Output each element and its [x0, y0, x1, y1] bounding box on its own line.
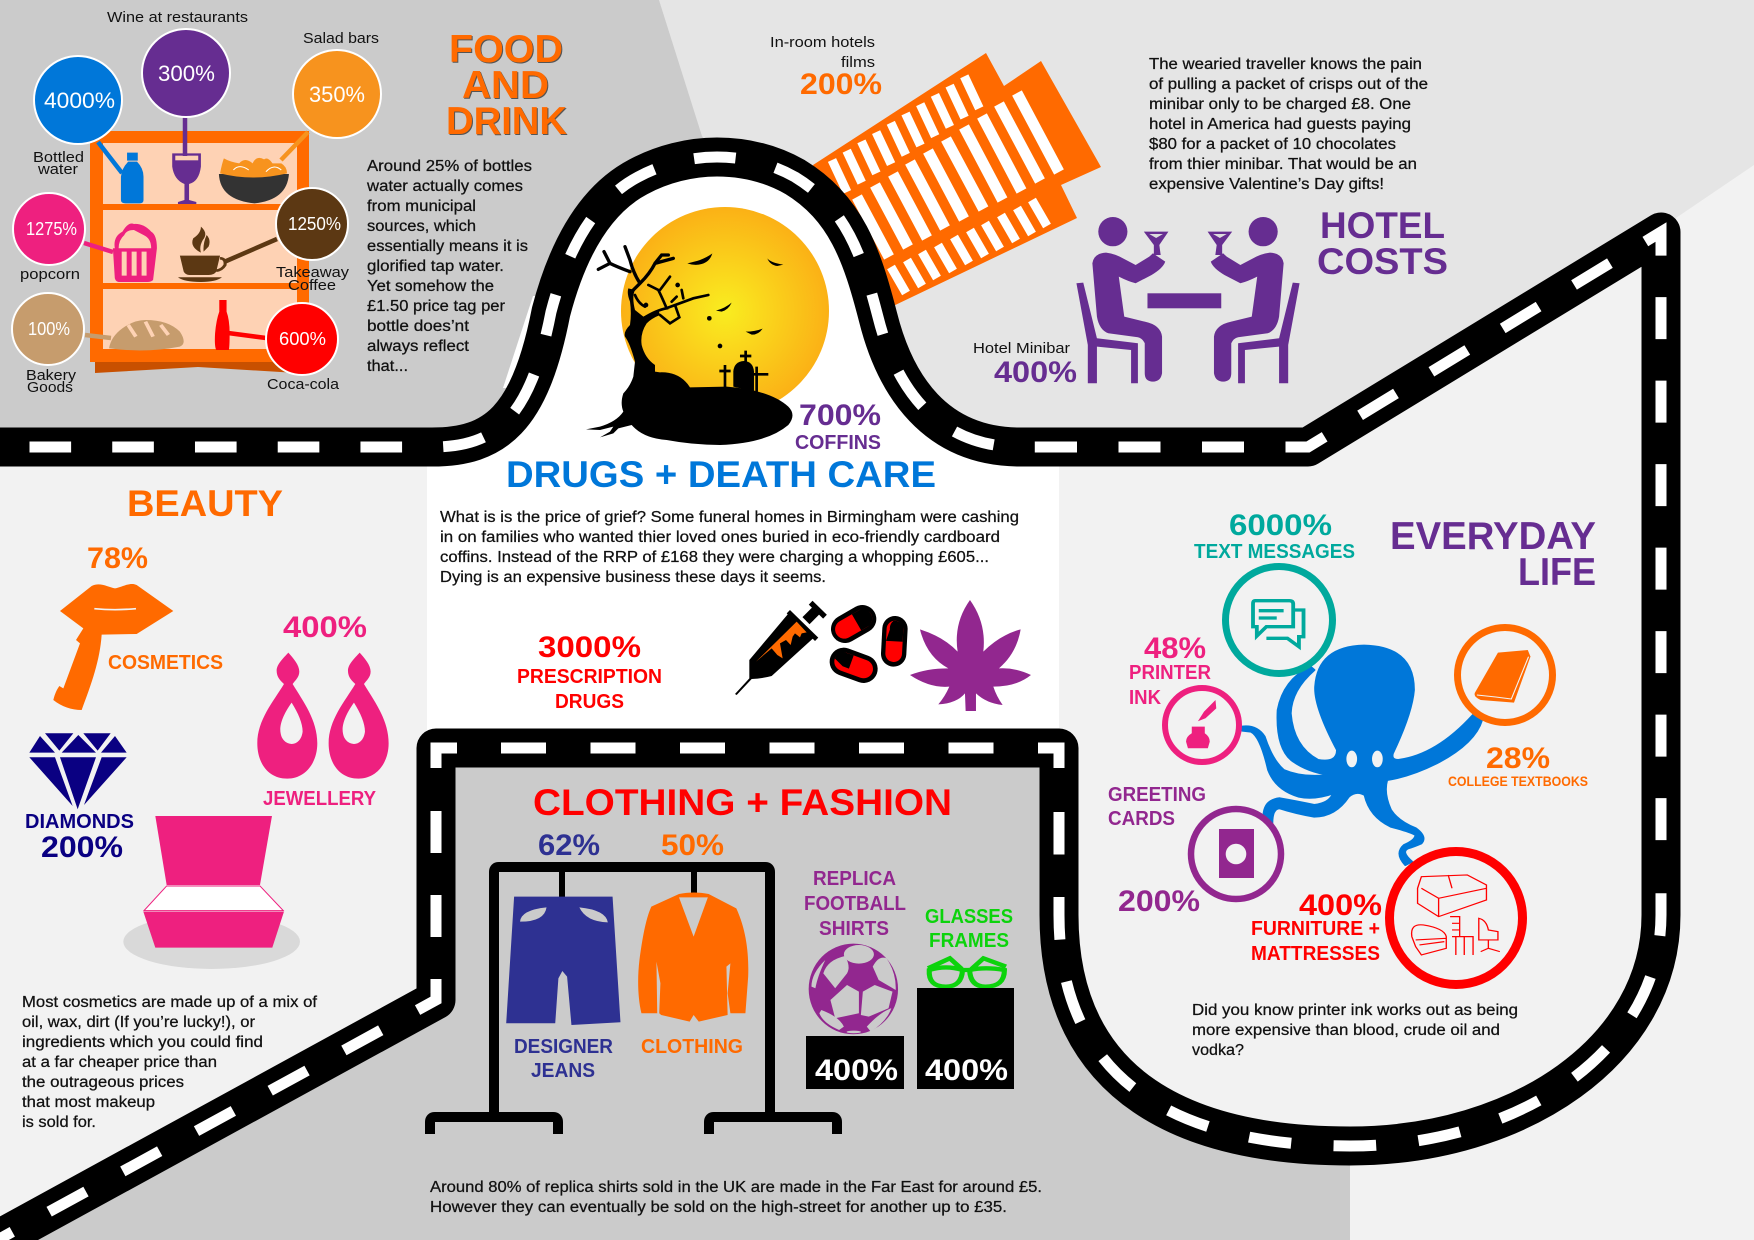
food body text: sources, which	[367, 218, 476, 235]
icon: hotel buildings	[813, 53, 1101, 308]
clothing body text	[430, 1179, 1042, 1216]
circle: 100% bakery: 100%	[28, 319, 70, 339]
beauty body text: the outrageous prices	[22, 1074, 184, 1091]
stat: cosmetics: COSMETICS	[108, 652, 223, 674]
beauty body text: oil, wax, dirt (If you’re lucky!), or	[22, 1014, 255, 1031]
stat: 62% designer jeans	[514, 829, 614, 1082]
stat: text messages: 6000%	[1229, 509, 1332, 542]
stat: text messages: TEXT MESSAGES	[1194, 541, 1355, 563]
clothing body text: However they can eventually be sold on the high-street for another up to £35.	[430, 1199, 1007, 1216]
food labels: water	[37, 161, 78, 178]
beauty body text: Most cosmetics are made up of a mix of	[22, 994, 318, 1011]
label: hotel minibar: Hotel Minibar	[973, 340, 1070, 357]
stat: glasses frames: FRAMES	[929, 930, 1009, 952]
icon: earrings	[257, 653, 389, 779]
hotel body text: minibar only to be charged £8. One	[1149, 96, 1411, 113]
stat: greeting cards: CARDS	[1108, 808, 1175, 830]
label: in-room hotel films: 200%	[800, 68, 882, 101]
icon: jeans and jacket	[506, 892, 748, 1025]
stat: diamonds	[25, 811, 134, 864]
circle: 100% bakery	[12, 293, 84, 365]
stat: 700% coffins	[795, 399, 881, 454]
stat: jewellery	[263, 611, 377, 810]
connector lines	[84, 115, 308, 338]
circle: 1275% popcorn	[13, 193, 85, 265]
heading: food and drink	[446, 28, 568, 144]
food body text: glorified tap water.	[367, 258, 504, 275]
heading: food and drink: DRINK	[446, 100, 567, 143]
drugs body text: coffins. Instead of the RRP of £168 they were charging a whopping £605...	[440, 549, 989, 566]
stat: furniture and mattresses: FURNITURE +	[1251, 918, 1380, 940]
panel: hotel costs	[770, 34, 1448, 389]
icon: football	[809, 944, 898, 1034]
icon: syringe, pills, leaf	[735, 600, 1031, 711]
circle: 600% coca-cola	[266, 303, 338, 375]
icon: textbook circle	[1458, 628, 1552, 722]
panel: everyday life	[1108, 509, 1596, 1059]
drugs body text: What is is the price of grief? Some funeral homes in Birmingham were cashing	[440, 509, 1019, 526]
stat: diamonds: DIAMONDS	[25, 811, 134, 833]
circle: 1275% popcorn: 1275%	[26, 219, 77, 239]
icon: moon and graveyard	[586, 207, 829, 445]
food labels: Bottled	[33, 149, 84, 166]
icon: octopus	[1242, 646, 1482, 865]
food labels: Bakery	[26, 367, 77, 384]
hotel body text: of pulling a packet of crisps out of the	[1149, 76, 1428, 93]
heading: food and drink: FOOD	[450, 29, 564, 72]
bar: 400% shirts: 400%	[815, 1054, 898, 1087]
food body text: bottle does’nt	[367, 318, 470, 335]
stat: diamonds: 200%	[41, 831, 123, 864]
heading: food and drink: AND	[463, 65, 550, 108]
food body text: always reflect	[367, 338, 470, 355]
stat: replica football shirts: SHIRTS	[819, 918, 889, 940]
everyday body text: more expensive than blood, crude oil and	[1192, 1022, 1500, 1039]
stat: jewellery: JEWELLERY	[263, 788, 377, 810]
stat: printer ink	[1129, 632, 1212, 709]
food labels: Takeaway	[276, 264, 350, 281]
drugs body text	[440, 509, 1019, 586]
stat: 50% clothing: 50%	[661, 829, 724, 862]
stat: 62% designer jeans: JEANS	[531, 1060, 595, 1082]
hotel body text: expensive Valentine’s Day gifts!	[1149, 176, 1384, 193]
heading: everyday life: LIFE	[1518, 551, 1596, 594]
food labels: Coca-cola	[267, 376, 340, 393]
stat: greeting cards	[1108, 784, 1206, 918]
stat: glasses frames: GLASSES	[925, 906, 1013, 928]
circle: 600% coca-cola: 600%	[279, 329, 326, 349]
stat: 3000% prescription drugs: DRUGS	[555, 691, 624, 713]
stat: greeting cards: GREETING	[1108, 784, 1206, 806]
beauty body text: that most makeup	[22, 1094, 155, 1111]
panel: drugs and death care	[440, 207, 1031, 713]
panel: beauty	[22, 483, 389, 1131]
food labels: Salad bars	[303, 30, 379, 47]
stat: furniture and mattresses: 400%	[1299, 889, 1382, 922]
heading: hotel costs: COSTS	[1317, 241, 1448, 282]
icon: glasses	[928, 958, 1006, 987]
bar: 400% shirts	[806, 1036, 904, 1089]
stat: cosmetics	[87, 542, 223, 674]
heading: food and drink: DRINK	[447, 101, 568, 144]
heading: food and drink: FOOD	[449, 28, 563, 71]
icon: ring box	[123, 816, 300, 969]
panel: clothing and fashion	[430, 782, 1042, 1216]
hotel body text: $80 for a packet of 10 chocolates	[1149, 136, 1396, 153]
heading: hotel costs: HOTEL	[1320, 205, 1445, 246]
stat: 62% designer jeans: 62%	[538, 829, 600, 862]
food body text: Yet somehow the	[367, 278, 494, 295]
stat: greeting cards: 200%	[1118, 885, 1200, 918]
hotel body text	[1149, 56, 1428, 193]
stat: 700% coffins: 700%	[799, 399, 881, 432]
food body text: £1.50 price tag per	[367, 298, 505, 315]
beauty body text	[22, 994, 318, 1131]
stat: printer ink: PRINTER	[1129, 662, 1212, 684]
icon: greeting card circle	[1191, 809, 1281, 899]
stat: 50% clothing: CLOTHING	[641, 1036, 743, 1058]
stat: 3000% prescription drugs: PRESCRIPTION	[517, 666, 662, 688]
hotel body text: hotel in America had guests paying	[1149, 116, 1411, 133]
label: hotel minibar	[973, 340, 1077, 389]
food body text	[366, 158, 532, 375]
circle: 300% wine	[142, 29, 230, 117]
food body text: from municipal	[367, 198, 476, 215]
circle: 4000% bottled water	[34, 56, 122, 144]
heading: food and drink: AND	[462, 64, 549, 107]
stat: furniture and mattresses	[1251, 889, 1382, 965]
bar: 400% glasses: 400%	[925, 1054, 1008, 1087]
clothing body text: Around 80% of replica shirts sold in the UK are made in the Far East for around £5.	[430, 1179, 1042, 1196]
circle: 1250% coffee	[276, 188, 348, 260]
stat: text messages	[1194, 509, 1355, 563]
shelf unit	[90, 131, 309, 373]
heading: drugs and death care: DRUGS + DEATH CARE	[506, 454, 936, 495]
circle: 1250% coffee: 1250%	[288, 214, 341, 234]
stat: 62% designer jeans: DESIGNER	[514, 1036, 614, 1058]
heading: everyday life	[1390, 515, 1596, 594]
food labels: Goods	[27, 379, 73, 396]
everyday body text: Did you know printer ink works out as being	[1192, 1002, 1518, 1019]
label: hotel minibar: 400%	[994, 356, 1077, 389]
stat: 3000% prescription drugs: 3000%	[538, 631, 641, 664]
stat: replica football shirts	[804, 868, 906, 940]
stat: cosmetics: 78%	[87, 542, 148, 575]
beauty body text: is sold for.	[22, 1114, 96, 1131]
food body text: essentially means it is	[367, 238, 528, 255]
circle: 350% salad: 350%	[309, 82, 365, 107]
stat: glasses frames	[925, 906, 1013, 952]
stat: 700% coffins: COFFINS	[795, 432, 881, 454]
stat: replica football shirts: FOOTBALL	[804, 893, 906, 915]
beauty body text: at a far cheaper price than	[22, 1054, 217, 1071]
food labels: Wine at restaurants	[107, 9, 248, 26]
heading: everyday life: EVERYDAY	[1390, 515, 1596, 558]
drugs body text: Dying is an expensive business these days it seems.	[440, 569, 826, 586]
stat: college textbooks	[1448, 742, 1588, 789]
icon: furniture circle	[1390, 852, 1522, 984]
hotel body text: The wearied traveller knows the pain	[1149, 56, 1422, 73]
everyday body text	[1192, 1002, 1518, 1059]
circle: 300% wine: 300%	[158, 61, 215, 86]
icon: lips and lipstick	[53, 584, 173, 710]
icon: diamond	[29, 733, 127, 809]
icon: people toasting at table	[1076, 217, 1300, 383]
food labels: popcorn	[20, 266, 80, 283]
shelf items	[109, 153, 289, 350]
drugs body text: in on families who wanted thier loved ones buried in eco-friendly cardboard	[440, 529, 1000, 546]
heading: hotel costs	[1317, 205, 1448, 282]
everyday body text: vodka?	[1192, 1042, 1244, 1059]
stat: printer ink: 48%	[1144, 632, 1206, 665]
panel: food and drink	[12, 9, 568, 396]
food labels: Coffee	[288, 277, 336, 294]
heading: clothing and fashion: CLOTHING + FASHION	[533, 782, 952, 823]
stat: college textbooks: 28%	[1486, 742, 1550, 775]
stat: printer ink: INK	[1129, 687, 1162, 709]
food body text: that...	[367, 358, 408, 375]
label: in-room hotel films	[770, 34, 882, 101]
circle: 350% salad	[293, 50, 381, 138]
stat: furniture and mattresses: MATTRESSES	[1251, 943, 1380, 965]
stat: 50% clothing	[641, 829, 743, 1058]
food body text: Around 25% of bottles	[367, 158, 532, 175]
label: in-room hotel films: films	[841, 54, 875, 71]
clothes rack	[430, 867, 837, 1134]
food labels	[20, 9, 379, 396]
beauty body text: ingredients which you could find	[22, 1034, 263, 1051]
stat: 3000% prescription drugs	[517, 631, 662, 713]
stat: replica football shirts: REPLICA	[813, 868, 896, 890]
heading: beauty: BEAUTY	[127, 483, 283, 524]
hotel body text: from thier minibar. That would be an	[1149, 156, 1417, 173]
label: in-room hotel films: In-room hotels	[770, 34, 875, 51]
icon: text messages circle	[1226, 566, 1332, 674]
food body text: water actually comes	[366, 178, 523, 195]
bar: 400% glasses	[917, 988, 1014, 1089]
icon: printer ink circle	[1165, 688, 1239, 762]
stat: jewellery: 400%	[283, 611, 367, 644]
stat: college textbooks: COLLEGE TEXTBOOKS	[1448, 773, 1588, 789]
circle: 4000% bottled water: 4000%	[44, 88, 115, 113]
